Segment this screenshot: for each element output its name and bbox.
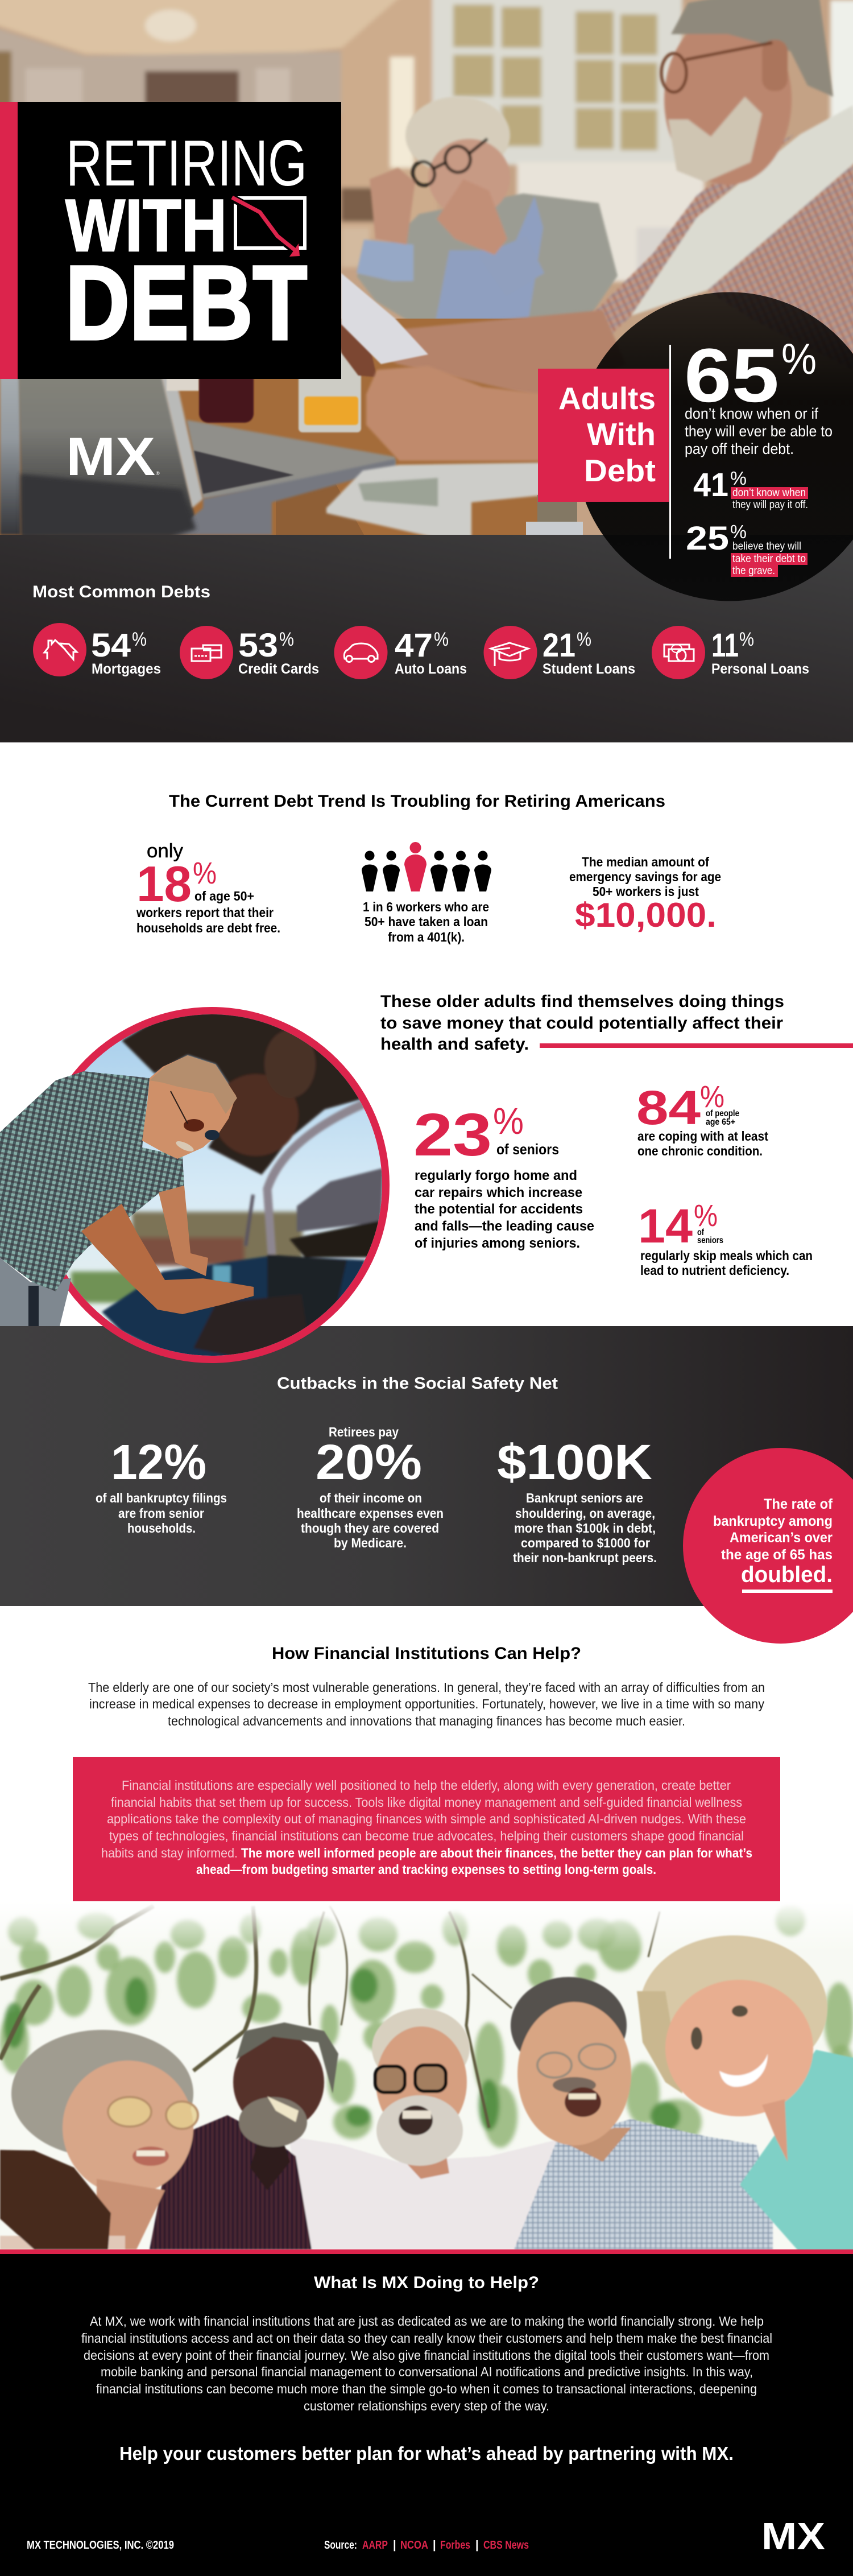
stat: 100K bankrupt seniors debt: their non-bankrupt peers. <box>513 1550 657 1565</box>
stat: 84 percent chronic condition <box>636 1080 768 1158</box>
stat: 14 percent skip meals: seniors <box>697 1236 723 1245</box>
icon: falling debt chart <box>232 197 305 257</box>
footer: sources: | <box>393 2539 396 2552</box>
stat: 14 percent skip meals: regularly skip meals which can <box>640 1248 813 1263</box>
stat: 20 percent income on healthcare <box>297 1425 444 1550</box>
stat: 41 percent: don’t know when <box>732 487 806 499</box>
callout: bankruptcy rate doubled: bankruptcy among <box>713 1513 833 1529</box>
footer: sources <box>324 2539 529 2552</box>
stat: 12 percent bankruptcy: are from senior <box>118 1506 204 1521</box>
paragraph: MX help: mobile banking and personal financial management to conversational AI notifications and predictive insights. In this way, <box>101 2364 753 2379</box>
icon: house <box>33 623 86 676</box>
stat: 12 percent bankruptcy <box>96 1435 227 1535</box>
footer: sources: AARP <box>362 2539 388 2552</box>
person: dark hand on shoulder <box>0 2150 111 2249</box>
stat: 84 percent chronic condition: age 65+ <box>706 1117 735 1127</box>
photo circle contents <box>66 1014 382 1356</box>
panel: financial institutions red box: The more well informed people are about their finances, the better they can plan for what’s <box>241 1846 752 1860</box>
heading: cutbacks: Cutbacks in the Social Safety Net <box>277 1374 558 1393</box>
stat: 65 percent: % <box>781 335 817 383</box>
debt type: student loans: % <box>577 629 591 650</box>
adults with debt red label <box>538 369 669 502</box>
icon: money <box>652 626 705 679</box>
black circle: adults with debt <box>538 292 853 601</box>
logo: MX hero: ® <box>156 470 160 476</box>
callout: bankruptcy rate doubled: the age of 65 has <box>721 1547 833 1563</box>
stat: 25 percent: the grave. <box>732 565 775 577</box>
paragraph: elderly vulnerable generations: The elderly are one of our society’s most vulnerable generations. In general, they’re faced with an array of difficulties from an <box>88 1680 765 1695</box>
stat: 41 percent: they will pay it off. <box>732 499 808 511</box>
stat: 12 percent bankruptcy: of all bankruptcy filings <box>96 1491 227 1505</box>
debt type: student loans: Student Loans <box>543 661 635 677</box>
stat: median emergency savings <box>569 854 721 934</box>
heading: older adults: health and safety. <box>380 1035 529 1054</box>
title: retiring: RETIRING <box>66 127 307 200</box>
debt type: auto loans: % <box>434 629 449 650</box>
panel: financial institutions red box <box>73 1757 780 1901</box>
kitchen table and laptop <box>0 273 626 539</box>
heading: most common debts: Most Common Debts <box>32 583 210 601</box>
panel: financial institutions red box: applications take the complexity out of managing finances with simple and sophisticated AI-driven nudges. With these <box>107 1811 746 1826</box>
stat: 18 percent debt free: workers report that their <box>136 905 274 920</box>
stat: median emergency savings: $10,000. <box>575 896 717 934</box>
stat: 84 percent chronic condition: one chronic condition. <box>637 1143 763 1158</box>
footer: sources: NCOA <box>400 2539 428 2552</box>
adults with debt red label: With <box>587 416 656 452</box>
heading: what is MX doing: What Is MX Doing to Help? <box>314 2273 539 2292</box>
text: 1 in 6 workers: from a 401(k). <box>388 930 465 944</box>
heading: current debt trend: The Current Debt Trend Is Troubling for Retiring Americans <box>169 792 665 811</box>
stat: median emergency savings: emergency savings for age <box>569 869 721 884</box>
heading: older adults: These older adults find themselves doing things <box>380 992 784 1011</box>
panel: financial institutions red box: financial habits that set them up for success. Tools like digital money management and self-guided financial wellness <box>111 1795 742 1810</box>
panel: financial institutions red box: types of technologies, financial institutions can become true advocates, helping their customers shape good financial <box>109 1828 744 1843</box>
stat: 84 percent chronic condition: of people <box>706 1109 739 1118</box>
vertical divider <box>669 345 671 559</box>
stat: 25 percent: believe they will <box>732 540 801 552</box>
logo: MX hero: MX <box>66 427 155 487</box>
stat: 100K bankrupt seniors debt: more than $100k in debt, <box>514 1521 656 1535</box>
dark band background <box>0 535 853 742</box>
paragraph: MX help: financial institutions access and act on their data so they can really know their customers and help them make the best financial <box>81 2331 772 2346</box>
footer: sources: | <box>475 2539 479 2552</box>
stat: 41 percent <box>693 467 808 511</box>
woman with glasses <box>357 97 618 336</box>
footer: copyright: MX TECHNOLOGIES, INC. ©2019 <box>27 2539 174 2552</box>
debt type: mortgages: 54 <box>91 627 131 664</box>
stat: 20 percent income on healthcare: healthcare expenses even <box>297 1506 444 1521</box>
photo: group of laughing seniors under trees <box>0 1901 853 2253</box>
paragraph: MX help: At MX, we work with financial institutions that are just as dedicated as we are to making the world financially strong. We help <box>90 2314 764 2329</box>
stat: 23 percent of seniors <box>413 1100 594 1251</box>
debt type: auto loans: 47 <box>395 627 433 664</box>
stat: 84 percent chronic condition: 84 <box>636 1081 701 1134</box>
debt type: mortgages <box>33 623 161 677</box>
person: man in cap <box>150 2022 338 2249</box>
stat: 25 percent: % <box>730 521 747 542</box>
panel: financial institutions red box: habits and stay informed. <box>101 1846 238 1860</box>
person: blonde woman in teal <box>637 1935 853 2253</box>
stat: 41 percent: 41 <box>693 467 728 503</box>
stat: median emergency savings: The median amount of <box>582 854 709 869</box>
paragraph: MX help: decisions at every point of their financial journey. We also give financial institutions the digital tools their customers want—from <box>84 2348 769 2363</box>
stat: 100K bankrupt seniors debt <box>497 1435 657 1565</box>
stat: 14 percent skip meals: % <box>694 1199 718 1233</box>
paragraph: elderly vulnerable generations: technological advancements and innovations that managing finances has become much easier. <box>168 1714 685 1728</box>
foliage and branches <box>0 1904 853 2148</box>
debt type: auto loans <box>334 626 467 679</box>
debt type: credit cards: 53 <box>238 627 278 664</box>
hero photo: couple reviewing bills in kitchen <box>0 0 853 539</box>
man figure <box>0 1055 254 1326</box>
black title panel <box>18 102 341 379</box>
stat: 65 percent: don’t know when or if <box>685 405 818 422</box>
person: woman with glasses <box>0 2030 198 2249</box>
debt type: personal loans <box>652 626 809 679</box>
stat: 100K bankrupt seniors debt: Bankrupt seniors are <box>526 1491 643 1505</box>
stat: 18 percent debt free: of age 50+ <box>194 889 254 903</box>
panel: financial institutions red box: ahead—from budgeting smarter and tracking expenses to setting long-term goals. <box>196 1862 656 1877</box>
callout: bankruptcy rate doubled: The rate of <box>764 1496 833 1512</box>
paragraph: MX help <box>81 2314 772 2413</box>
logo: MX footer: MX <box>761 2515 825 2558</box>
stat: 100K bankrupt seniors debt: shouldering, on average, <box>515 1506 655 1521</box>
stat: 23 percent of seniors: of seniors <box>496 1141 559 1158</box>
stat: 14 percent skip meals: of <box>697 1228 705 1237</box>
text: 1 in 6 workers: 50+ have taken a loan <box>365 914 488 929</box>
title: with: WITH <box>65 184 227 267</box>
person: man in white shirt <box>288 2008 560 2249</box>
stat: 14 percent skip meals: 14 <box>638 1199 693 1253</box>
heading: older adults: to save money that could potentially affect their <box>380 1014 783 1033</box>
stat: 65 percent <box>684 333 833 457</box>
stat: 84 percent chronic condition: are coping with at least <box>637 1129 768 1143</box>
debt type: auto loans: Auto Loans <box>395 661 467 677</box>
paragraph: MX help: financial institutions can become much more than the simple go-to when it comes to transactional interactions, deepening <box>96 2381 757 2396</box>
icon: credit cards <box>180 626 233 679</box>
photo: man under car hood <box>0 1007 398 1371</box>
stat: 18 percent debt free <box>136 840 280 935</box>
stat: 23 percent of seniors: and falls—the leading cause <box>415 1219 594 1234</box>
stat: 12 percent bankruptcy: 12% <box>111 1435 206 1490</box>
debt type: credit cards: Credit Cards <box>238 661 319 677</box>
debt type: student loans <box>483 626 635 679</box>
red stripe <box>0 2249 853 2254</box>
stat: 65 percent: they will ever be able to <box>685 423 833 440</box>
heading: how financial institutions can help: How Financial Institutions Can Help? <box>272 1644 581 1663</box>
stat: 20 percent income on healthcare: of their income on <box>320 1491 422 1505</box>
stat: median emergency savings: 50+ workers is just <box>593 884 699 899</box>
stat: 23 percent of seniors: % <box>493 1100 524 1142</box>
red rule <box>540 1043 853 1048</box>
stat: 100K bankrupt seniors debt: $100K <box>497 1435 652 1490</box>
paragraph: MX help: customer relationships every step of the way. <box>304 2399 549 2413</box>
stat: 25 percent: take their debt to <box>732 553 806 565</box>
debt type: mortgages: % <box>132 629 147 650</box>
stat: 25 percent <box>686 520 808 577</box>
paragraph: elderly vulnerable generations <box>88 1680 765 1728</box>
red title accent bar <box>0 102 18 379</box>
footer: sources: Forbes <box>440 2539 470 2552</box>
panel: black footer <box>0 2254 853 2576</box>
stat: 100K bankrupt seniors debt: compared to $1000 for <box>521 1535 650 1550</box>
icon: graduation cap <box>483 626 537 679</box>
stat: 14 percent skip meals: lead to nutrient deficiency. <box>640 1263 789 1278</box>
debt type: credit cards <box>180 626 319 679</box>
debt type: personal loans: Personal Loans <box>711 661 809 677</box>
stat: 65 percent: pay off their debt. <box>685 440 794 457</box>
person: man in checked shirt <box>511 1977 773 2249</box>
debt type: personal loans: 11 <box>711 627 739 664</box>
footer: sources: | <box>433 2539 436 2552</box>
debt type: credit cards: % <box>279 629 294 650</box>
stat: 20 percent income on healthcare: by Medicare. <box>334 1535 407 1550</box>
stat: 18 percent debt free: only <box>147 840 183 862</box>
stat: 20 percent income on healthcare: Retirees pay <box>329 1425 399 1439</box>
footer: sources: Source: <box>324 2539 357 2552</box>
photo ring <box>34 1007 390 1363</box>
stat: 14 percent skip meals <box>638 1199 813 1278</box>
adults with debt red label: Debt <box>584 453 656 488</box>
callout: bankruptcy rate doubled: doubled. <box>741 1562 833 1587</box>
stat: 18 percent debt free: households are debt free. <box>136 920 280 935</box>
dark band: cutbacks background <box>0 1326 853 1606</box>
text: 1 in 6 workers: 1 in 6 workers who are <box>363 899 489 914</box>
paragraph: elderly vulnerable generations: increase in medical expenses to decrease in employment opportunities. Fortunately, however, we live in a time with so many <box>89 1696 764 1711</box>
title: debt: DEBT <box>65 245 307 362</box>
panel: financial institutions red box: Financial institutions are especially well positioned to help the elderly, along with every generation, create better <box>122 1778 731 1793</box>
debt type: mortgages: Mortgages <box>92 661 161 677</box>
stat: 23 percent of seniors: the potential for accidents <box>415 1202 583 1217</box>
stat: 25 percent: 25 <box>686 520 729 557</box>
stat: 23 percent of seniors: of injuries among seniors. <box>415 1236 580 1251</box>
footer: sources: CBS News <box>483 2539 529 2552</box>
stat: 84 percent chronic condition: % <box>700 1080 724 1114</box>
stat: 20 percent income on healthcare: 20% <box>316 1435 422 1490</box>
stat: 18 percent debt free: 18 <box>136 856 192 912</box>
people <box>0 1935 853 2253</box>
callout: bankruptcy rate doubled: American’s over <box>730 1530 833 1546</box>
debt type: student loans: 21 <box>543 627 575 664</box>
adults with debt red label: Adults <box>558 381 656 416</box>
stat: 12 percent bankruptcy: households. <box>127 1521 196 1535</box>
stat: 18 percent debt free: % <box>193 856 217 890</box>
heading: older adults <box>380 992 784 1054</box>
call to action: Help your customers better plan for what’s ahead by partnering with MX. <box>119 2443 734 2464</box>
stat: 41 percent: % <box>730 468 747 489</box>
debt type: personal loans: % <box>739 629 754 650</box>
title block <box>0 102 341 379</box>
icon: six workers, one highlighted <box>362 842 491 891</box>
text: 1 in 6 workers <box>363 899 489 944</box>
stat: 20 percent income on healthcare: though they are covered <box>301 1521 439 1535</box>
callout: bankruptcy rate doubled <box>683 1448 853 1644</box>
stat: 65 percent: 65 <box>684 333 779 418</box>
stat: 23 percent of seniors: car repairs which increase <box>415 1185 582 1200</box>
stat: 23 percent of seniors: 23 <box>413 1101 492 1169</box>
man with sweater <box>587 0 853 375</box>
stat: 23 percent of seniors: regularly forgo home and <box>415 1168 577 1183</box>
icon: car <box>334 626 388 679</box>
